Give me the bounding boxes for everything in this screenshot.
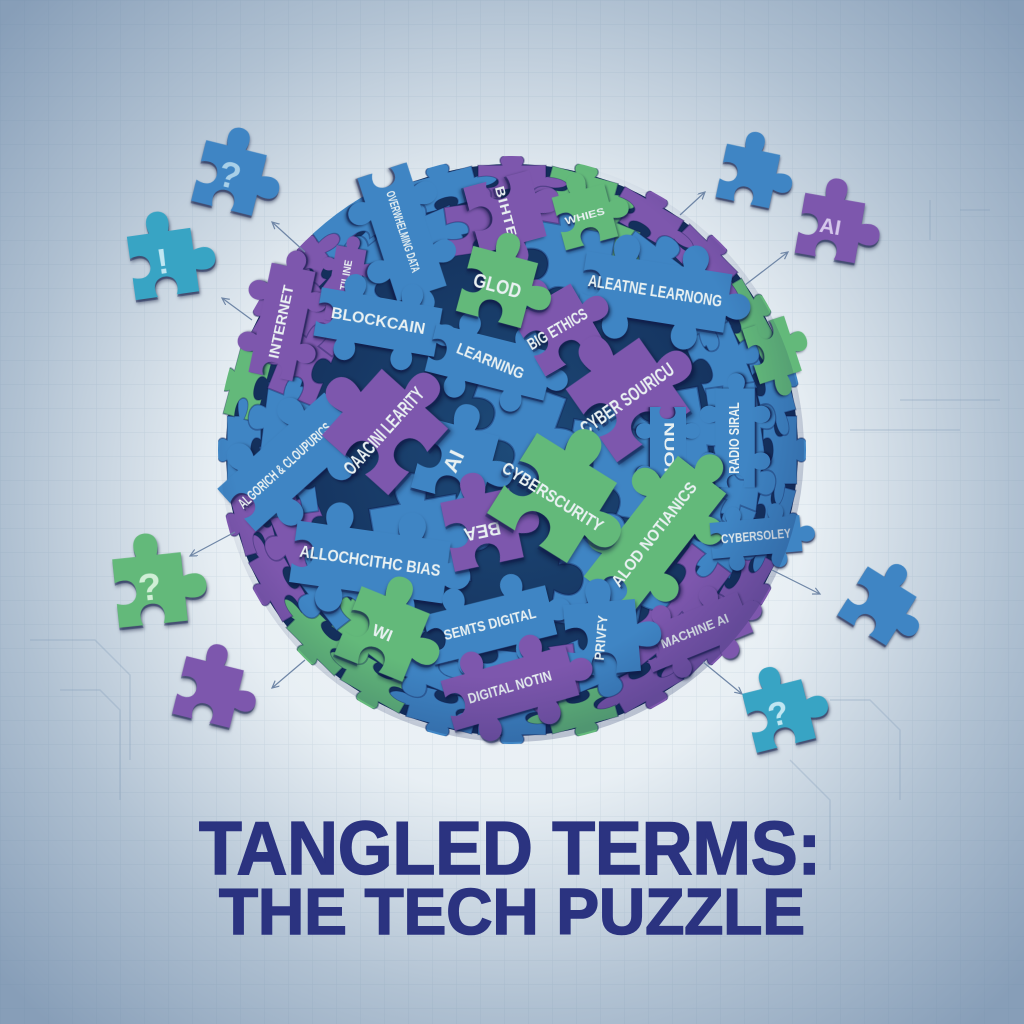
piece: blue lower centre bbox=[561, 574, 664, 677]
piece: aleatne learning strip bbox=[574, 229, 759, 359]
piece: cyber purple bbox=[541, 297, 714, 468]
piece: mid right blue term: NUON bbox=[661, 422, 677, 482]
piece: purple left edge term: INTERNET bbox=[266, 284, 297, 360]
floating piece: purple lower left bbox=[172, 637, 267, 733]
piece: machine learning purple: OAACINI LEARITY bbox=[340, 384, 429, 479]
piece: cloud notanics green bbox=[565, 422, 760, 629]
piece: blockchain strip: BLOCKCAIN bbox=[330, 305, 426, 338]
floating piece: blue question bbox=[191, 121, 291, 221]
piece: cloud green bbox=[456, 225, 565, 334]
piece: AI blue: AI bbox=[437, 446, 469, 476]
piece: lower right purple bbox=[631, 570, 775, 688]
floating piece: purple AI: AI bbox=[818, 213, 843, 240]
piece: purple bottom bbox=[435, 620, 604, 750]
piece: lower right purple: MACHINE AI bbox=[658, 611, 731, 651]
piece: learning bbox=[420, 305, 578, 424]
piece: purple top bbox=[463, 165, 574, 275]
title bbox=[199, 806, 821, 948]
piece: big ethics: BIG ETHICS bbox=[524, 305, 591, 354]
piece: cyber purple: CYBER SOURICU bbox=[577, 360, 679, 440]
floating piece: green question: ? bbox=[136, 566, 163, 610]
piece: right blue term bbox=[700, 373, 770, 488]
piece: big ethics bbox=[501, 253, 624, 376]
piece: purple BEA bbox=[435, 461, 546, 572]
piece: green lower left: WI bbox=[369, 620, 395, 646]
piece: algorithm and cloud strip bbox=[202, 361, 394, 548]
piece: learning: LEARNING bbox=[454, 340, 526, 383]
piece: purple upper left term bbox=[312, 232, 380, 327]
piece: diagnostic term bbox=[338, 156, 472, 327]
piece: green top: WHIES bbox=[564, 207, 606, 228]
floating piece: purple AI bbox=[795, 173, 888, 267]
piece: cloud green: GLOD bbox=[471, 269, 524, 303]
puzzle sphere bbox=[202, 150, 821, 750]
title: THE TECH PUZZLE bbox=[219, 875, 805, 948]
title: TANGLED TERMS: bbox=[199, 806, 821, 890]
floating piece: blue top right bbox=[716, 126, 801, 212]
piece: aleatne learning strip: ALEATNE LEARNONG bbox=[587, 272, 723, 311]
piece: AI blue bbox=[411, 395, 528, 512]
piece: right blue term: RADIO SIRAL bbox=[727, 402, 743, 474]
piece: algorithmic bias strip bbox=[286, 497, 478, 631]
piece: purple left edge term bbox=[232, 242, 336, 385]
piece: machine learning purple bbox=[293, 328, 468, 503]
piece: green right edge bbox=[742, 311, 821, 402]
piece: cybersecurity green: CYBERSCURITY bbox=[498, 458, 607, 536]
piece: semts strip: SEMTS DIGITAL bbox=[442, 606, 538, 644]
floating piece: teal exclamation bbox=[124, 204, 220, 300]
floating piece: blue lower right bbox=[837, 550, 942, 656]
piece: algorithmic bias strip: ALLOCHCITHC BIAS bbox=[299, 543, 442, 580]
arrows bbox=[190, 192, 820, 694]
piece: right lower term: CYBERSOLEY bbox=[720, 525, 792, 546]
floating piece: green question bbox=[110, 528, 210, 628]
piece: mid right blue term bbox=[636, 407, 700, 511]
sphere edge shading bbox=[220, 158, 804, 742]
piece: cloud notanics green: ALOD NOTIANICS bbox=[607, 478, 701, 590]
floating piece: teal question bbox=[737, 655, 835, 753]
piece: right lower term bbox=[708, 500, 818, 573]
piece: purple bottom: DIGITAL NOTIN bbox=[466, 668, 554, 707]
floating piece: teal exclamation: ! bbox=[154, 242, 171, 282]
piece: blue lower centre: PRIVFY bbox=[592, 615, 610, 661]
piece: diagnostic term: OVERWHELMING DATA bbox=[383, 189, 423, 274]
piece: purple BEA: BEA bbox=[462, 517, 503, 546]
floating piece: blue question: ? bbox=[214, 153, 245, 198]
piece: green lower left bbox=[334, 564, 461, 691]
piece: purple upper left term: MULTILINE bbox=[335, 259, 355, 311]
piece: semts strip bbox=[418, 562, 581, 684]
piece: green top bbox=[547, 162, 635, 250]
piece: blockchain strip bbox=[310, 269, 465, 379]
floating piece: teal question: ? bbox=[764, 694, 793, 735]
piece: algorithm and cloud strip: ALGORICH & CLOUPURICS bbox=[235, 419, 335, 512]
piece: purple top: BIHTE bbox=[492, 184, 520, 239]
piece: cybersecurity green bbox=[478, 401, 659, 579]
sphere core and back layers bbox=[212, 150, 812, 750]
